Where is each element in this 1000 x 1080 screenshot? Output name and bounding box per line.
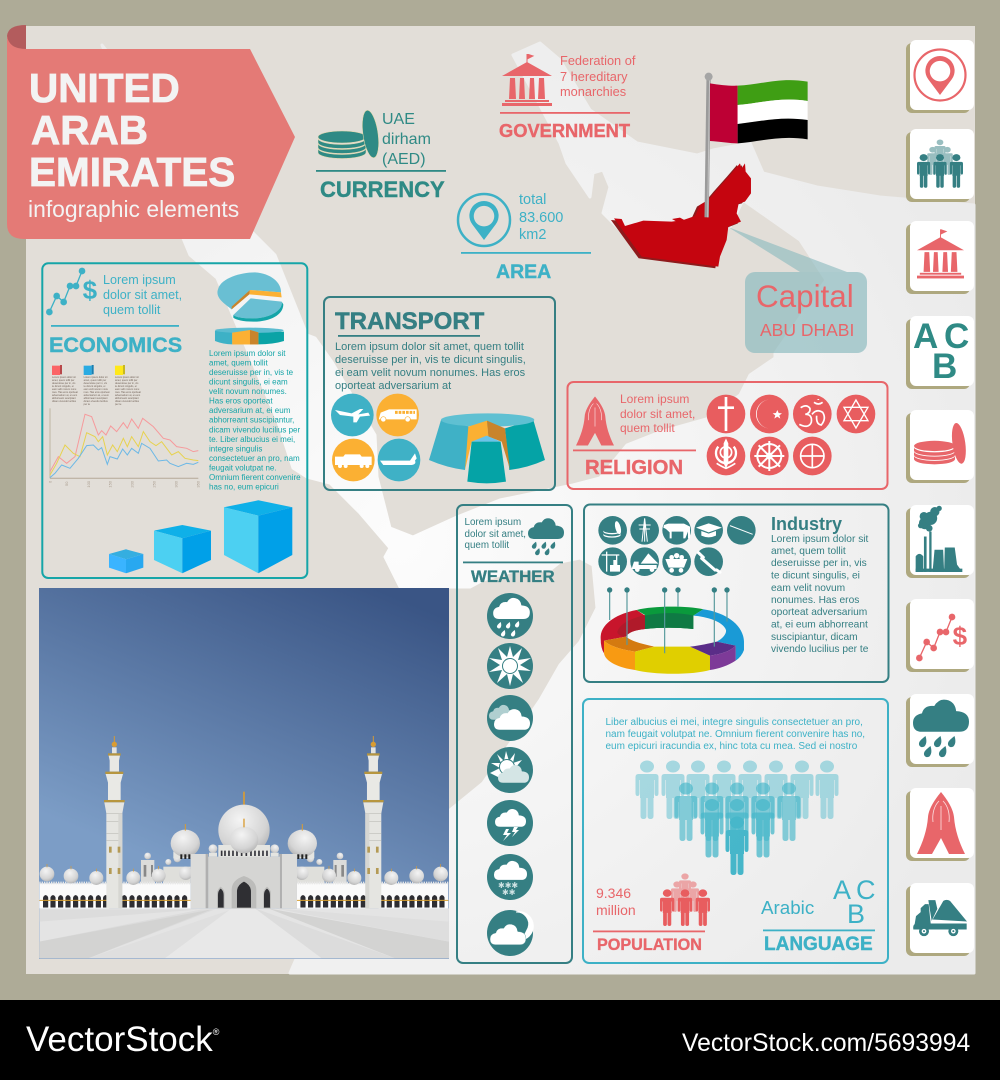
language value: Arabic bbox=[761, 897, 814, 918]
title text: UNITED bbox=[29, 65, 180, 111]
industry text: oporteat adversarium bbox=[771, 607, 867, 618]
pictogram crowd bbox=[636, 760, 838, 875]
government block: Federation of bbox=[560, 53, 636, 68]
population heading: POPULATION bbox=[597, 936, 702, 954]
weather heading: WEATHER bbox=[471, 567, 555, 586]
line chart with legend: amet, quem tollit per bbox=[115, 379, 138, 382]
line chart with legend: mes. Has eros oporteat bbox=[84, 391, 110, 394]
transport 3D cake chart bbox=[429, 413, 545, 483]
currency block: (AED) bbox=[382, 151, 426, 168]
icon: people group bbox=[660, 873, 710, 926]
religion text: quem tollit bbox=[620, 421, 675, 435]
area block: total bbox=[519, 192, 546, 208]
icon: people bbox=[917, 139, 963, 188]
UAE map and flag bbox=[611, 73, 808, 268]
weather icons bbox=[487, 593, 533, 956]
line chart with legend: adversarium at, ei eum bbox=[84, 394, 109, 397]
panel: population and language bbox=[583, 699, 888, 963]
transport text: deseruisse per in, vis te dicunt singulis, bbox=[335, 354, 526, 366]
religion symbols bbox=[707, 395, 875, 475]
mosque photo illustration bbox=[39, 588, 449, 959]
icon: language letters: B bbox=[932, 347, 957, 386]
3D cube bars bbox=[109, 500, 292, 573]
economics paragraph: adversarium at, ei eum bbox=[209, 406, 291, 415]
capital callout: ABU DHABI bbox=[760, 320, 854, 340]
currency block: CURRENCY bbox=[320, 177, 445, 202]
icon: dump truck bbox=[913, 900, 967, 936]
population figure: 9.346 bbox=[596, 885, 631, 901]
transport text: oporteat adversarium at bbox=[335, 380, 451, 392]
line chart with legend: per te bbox=[84, 403, 91, 406]
economics paragraph: velit novum nonumes. bbox=[209, 387, 287, 396]
line chart with legend: mes. Has eros oporteat bbox=[115, 391, 141, 394]
title text: EMIRATES bbox=[29, 149, 235, 195]
government block: monarchies bbox=[560, 84, 626, 99]
line chart with legend: te dicunt singulis, ei bbox=[52, 385, 74, 388]
transport text: ei eam velit novum nonumes. Has eros bbox=[335, 367, 526, 379]
economics paragraph: Omnium fierent convenire bbox=[209, 473, 301, 482]
line chart with legend: abhorreant suscipiant bbox=[84, 397, 108, 400]
economics intro: dolor sit amet, bbox=[103, 288, 182, 302]
language letters: B bbox=[847, 899, 865, 929]
icon: rain cloud bbox=[528, 518, 564, 555]
government block: 7 hereditary bbox=[560, 69, 628, 84]
area block bbox=[458, 192, 591, 283]
line chart with legend: 300 bbox=[173, 480, 178, 488]
economics paragraph: dicunt singulis, ei eam bbox=[209, 378, 288, 387]
economics paragraph: te. Liber albucius ei mei, bbox=[209, 435, 295, 444]
icon: map pin bbox=[914, 50, 966, 100]
industry heading: Industry bbox=[771, 514, 842, 534]
line chart with legend: 0 bbox=[47, 480, 52, 483]
line chart with legend: te dicunt singulis, ei bbox=[84, 385, 106, 388]
panel: industry bbox=[584, 504, 888, 682]
line chart with legend: 150 bbox=[107, 480, 112, 488]
language heading: LANGUAGE bbox=[764, 934, 873, 955]
line chart with legend: dicam vivendo lucilius bbox=[115, 400, 140, 403]
line chart with legend: abhorreant suscipiant bbox=[52, 397, 76, 400]
icon: language letters: C bbox=[944, 317, 969, 356]
icon: coins bbox=[914, 422, 968, 465]
line chart with legend: 50 bbox=[64, 481, 69, 486]
industry text: te dicunt singulis, ei bbox=[771, 570, 860, 582]
currency block bbox=[316, 109, 446, 202]
line chart with legend: mes. Has eros oporteat bbox=[52, 391, 78, 394]
population text: eum epicuri iracundia ex, hinc tota cu mea. Sed ei nostro bbox=[606, 741, 858, 752]
industry text: vivendo lucilius per te bbox=[771, 644, 869, 655]
watermark footer bbox=[0, 1000, 1000, 1080]
capital callout bbox=[728, 227, 867, 353]
icon: praying hands bbox=[917, 792, 965, 854]
line chart with legend: dicam vivendo lucilius bbox=[84, 400, 108, 403]
icon: government building bbox=[917, 230, 964, 278]
industry icons bbox=[598, 516, 756, 576]
icon: factory bbox=[916, 506, 962, 572]
economics paragraph: integre singulis bbox=[209, 444, 262, 453]
government block bbox=[499, 53, 636, 141]
icon: praying hands bbox=[576, 396, 614, 446]
area block: 83.600 bbox=[519, 210, 563, 226]
ring chart with pins bbox=[601, 587, 744, 674]
industry text: suscipiantur, dicam bbox=[771, 632, 858, 643]
weather text: quem tollit bbox=[464, 540, 509, 551]
panel: economics bbox=[42, 263, 307, 578]
panel: weather bbox=[457, 505, 572, 963]
economics paragraph: consectetuer an pro, nam bbox=[209, 454, 300, 463]
weather text: dolor sit amet, bbox=[464, 529, 526, 540]
economics paragraph: amet, quem tollit bbox=[209, 358, 268, 368]
line chart with legend: amet, quem tollit per bbox=[52, 379, 75, 382]
watermark footer: ® bbox=[213, 1027, 220, 1037]
population text: nam feugait volutpat ne. Omnium fierent convenire has no, bbox=[606, 729, 865, 740]
icon: economics chart bbox=[46, 268, 98, 315]
pie charts bbox=[215, 272, 284, 344]
currency block: dirham bbox=[382, 131, 431, 148]
line chart with legend: adversarium at, ei eum bbox=[52, 394, 77, 397]
capital callout: Capital bbox=[756, 279, 854, 314]
transport text: Lorem ipsum dolor sit amet, quem tollit bbox=[335, 341, 524, 353]
line chart with legend: eam velit novum nonu bbox=[115, 388, 140, 391]
economics paragraph: abhorreant suscipiantur, bbox=[209, 416, 294, 425]
line chart with legend: deseruisse per in, vis bbox=[84, 382, 108, 385]
industry text: eam velit novum bbox=[771, 583, 845, 594]
weather text: Lorem ipsum bbox=[464, 517, 521, 528]
line chart with legend: deseruisse per in, vis bbox=[52, 382, 76, 385]
industry text: Lorem ipsum dolor sit bbox=[771, 534, 869, 545]
economics paragraph: Lorem ipsum dolor sit bbox=[209, 349, 286, 358]
population text: Liber albucius ei mei, integre singulis consectetuer an pro, bbox=[606, 717, 863, 728]
religion text: Lorem ipsum bbox=[620, 392, 689, 406]
line chart with legend bbox=[47, 365, 201, 488]
economics paragraph: Has eros oporteat bbox=[209, 397, 273, 406]
economics intro: Lorem ipsum bbox=[103, 273, 176, 287]
line chart with legend: Lorem ipsum dolor sit bbox=[115, 376, 139, 379]
economics paragraph: has no, eum epicuri bbox=[209, 482, 279, 492]
economics intro: quem tollit bbox=[103, 303, 161, 317]
transport icons bbox=[331, 394, 420, 481]
title banner bbox=[7, 25, 295, 239]
religion heading: RELIGION bbox=[585, 457, 683, 479]
weather icons: ✱✱✱ bbox=[498, 881, 518, 890]
line chart with legend: 200 bbox=[129, 480, 134, 488]
line chart with legend: eam velit novum nonu bbox=[52, 388, 77, 391]
industry text: nonumes. Has eros bbox=[771, 595, 859, 606]
icon: rain bbox=[913, 700, 969, 757]
line chart with legend: 100 bbox=[86, 480, 91, 488]
sidebar icon tiles bbox=[906, 40, 974, 956]
government block: GOVERNMENT bbox=[499, 120, 630, 141]
transport heading: TRANSPORT bbox=[335, 308, 485, 335]
weather icons: ✱✱ bbox=[502, 888, 516, 897]
industry text: amet, quem tollit bbox=[771, 546, 846, 557]
line chart with legend: 350 bbox=[196, 480, 201, 488]
watermark footer: VectorStock bbox=[26, 1020, 213, 1059]
economics paragraph: feugait volutpat ne. bbox=[209, 463, 277, 472]
line chart with legend: Lorem ipsum dolor sit bbox=[84, 376, 108, 379]
line chart with legend: 250 bbox=[151, 480, 156, 488]
population figure: million bbox=[596, 902, 636, 918]
line chart with legend: per te bbox=[115, 403, 122, 406]
icon: economy chart bbox=[916, 614, 968, 661]
line chart with legend: deseruisse per in, vis bbox=[115, 382, 139, 385]
industry text: deseruisse per in, vis bbox=[771, 558, 867, 569]
area block: AREA bbox=[496, 261, 551, 283]
economics paragraph: dicam vivendo lucilius per bbox=[209, 425, 300, 434]
language letters: A bbox=[833, 875, 851, 905]
line chart with legend: eam velit novum nonu bbox=[84, 388, 109, 391]
currency block: UAE bbox=[382, 111, 415, 128]
panel: transport bbox=[324, 297, 555, 490]
line chart with legend: te dicunt singulis, ei bbox=[115, 385, 137, 388]
area block: km2 bbox=[519, 227, 546, 243]
title text: ARAB bbox=[31, 107, 148, 153]
panel: religion bbox=[568, 382, 888, 489]
industry text: at, ei eum abhorreant bbox=[771, 620, 868, 630]
language letters: C bbox=[856, 875, 876, 905]
economics heading: ECONOMICS bbox=[49, 332, 182, 357]
economics paragraph: deseruisse per in, vis te bbox=[209, 368, 294, 377]
icon: language letters: A bbox=[913, 317, 938, 356]
line chart with legend: adversarium at, ei eum bbox=[115, 394, 140, 397]
title banner: infographic elements bbox=[28, 196, 239, 222]
line chart with legend: Lorem ipsum dolor sit bbox=[52, 376, 76, 379]
watermark footer: VectorStock.com/5693994 bbox=[682, 1030, 970, 1057]
religion text: dolor sit amet, bbox=[620, 407, 695, 421]
line chart with legend: amet, quem tollit per bbox=[84, 379, 106, 382]
line chart with legend: abhorreant suscipiant bbox=[115, 397, 139, 400]
line chart with legend: dicam vivendo lucilius bbox=[52, 400, 77, 403]
